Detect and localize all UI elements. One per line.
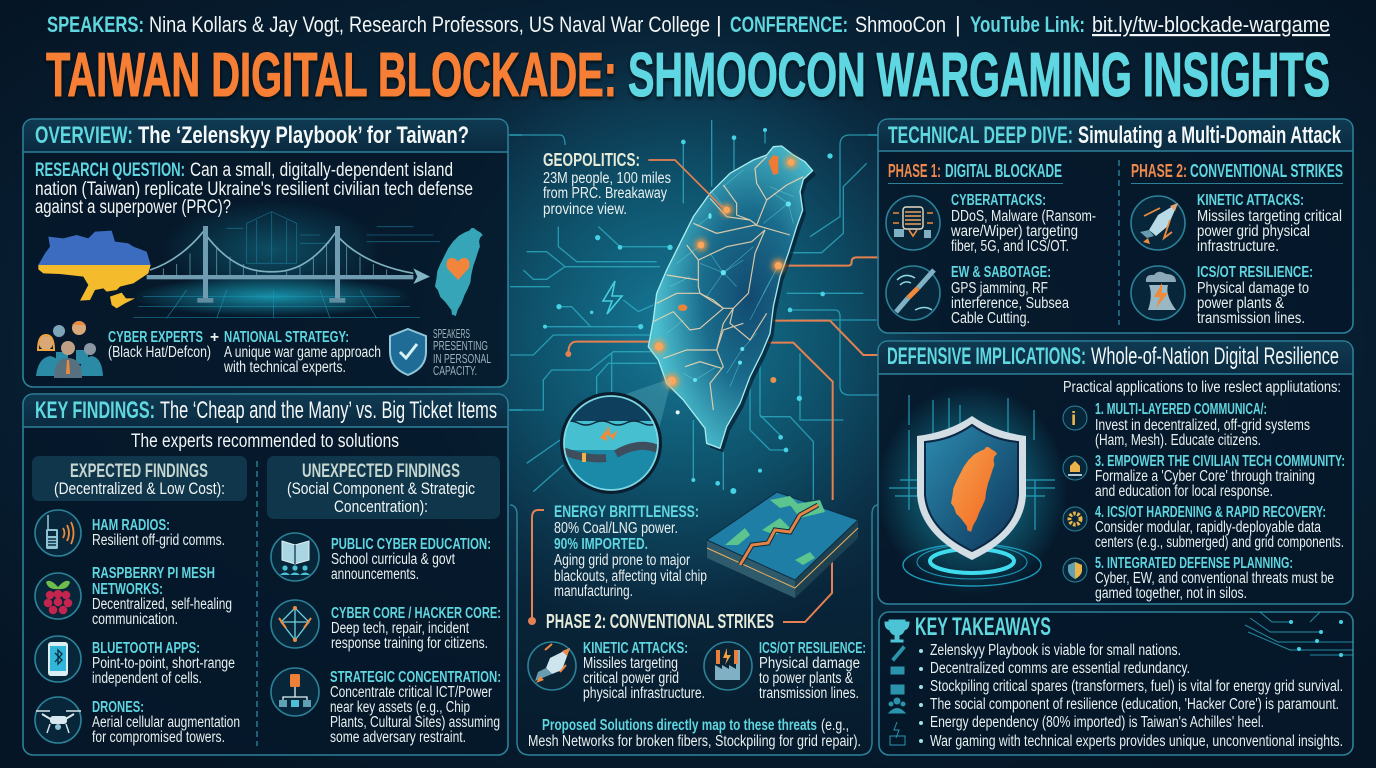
item: raspberry pi bbox=[35, 565, 232, 628]
text block: personal capacity disclaimer: SPEAKERS bbox=[433, 326, 470, 341]
icon: network core bbox=[271, 600, 319, 648]
heading: overview bbox=[35, 122, 469, 149]
column header: expected findings: (Decentralized & Low Cost): bbox=[54, 479, 225, 498]
illustration: shield with Taiwan bbox=[877, 385, 1067, 595]
item: kinetic attacks center bbox=[528, 640, 705, 702]
header: speakers, conference and link: CONFERENCE: bbox=[730, 12, 848, 37]
icon: phone bluetooth bbox=[35, 636, 81, 682]
column header: unexpected findings: (Social Component & Strategic bbox=[287, 479, 475, 498]
item: ew and sabotage: Cable Cutting. bbox=[951, 310, 1030, 327]
item: ics/ot center bbox=[704, 640, 866, 702]
heading: phase 2 center: PHASE 2: CONVENTIONAL STRIKES bbox=[546, 611, 774, 633]
column header: unexpected findings: Concentration): bbox=[334, 497, 428, 516]
item: integrated planning bbox=[1063, 555, 1334, 602]
item: strategic concentration bbox=[271, 668, 501, 746]
text block: geopolitics: 23M people, 100 miles bbox=[543, 170, 671, 187]
header: speakers, conference and link: | bbox=[716, 12, 722, 37]
orange connector to phase 2 bbox=[783, 555, 832, 622]
title: TAIWAN DIGITAL BLOCKADE: bbox=[46, 41, 617, 110]
illustration: bridge from Ukraine to Taiwan bbox=[38, 200, 440, 318]
heading: key findings bbox=[35, 397, 497, 424]
icon: radio bbox=[35, 510, 81, 556]
item: ics/ot resilience: power plants & bbox=[1197, 295, 1285, 312]
item: public cyber education bbox=[271, 533, 491, 583]
text block: energy brittleness: 90% IMPORTED. bbox=[554, 536, 648, 553]
takeaway list bbox=[919, 642, 1343, 750]
center background glow bbox=[340, 0, 1040, 680]
heading: key findings: The ‘Cheap and the Many’ vs. Big Ticket Items bbox=[160, 397, 497, 424]
orange bracket bbox=[528, 510, 544, 625]
item: strategic concentration: some adversary restraint. bbox=[330, 729, 466, 746]
item: ics/ot center: ICS/OT RESILIENCE: bbox=[759, 640, 866, 657]
item: public cyber education: PUBLIC CYBER EDUCATION: bbox=[331, 536, 491, 553]
icon: trophy bbox=[885, 620, 909, 642]
item: ham radios bbox=[35, 510, 225, 556]
item: drones bbox=[35, 697, 240, 746]
item: drones: for compromised towers. bbox=[92, 729, 225, 746]
connectors between panels bbox=[508, 135, 878, 410]
item: cyberattacks: fiber, 5G, and ICS/OT. bbox=[951, 238, 1069, 255]
item: multi-layered: Invest in decentralized, off-grid systems bbox=[1095, 417, 1310, 434]
item: strategic concentration: STRATEGIC CONCENTRATION: bbox=[330, 669, 501, 686]
item: empower: Formalize a 'Cyber Core' through training bbox=[1095, 468, 1315, 485]
text block: geopolitics: from PRC. Breakaway bbox=[543, 185, 667, 202]
icon: info bbox=[1063, 406, 1087, 430]
text block: research question: Can a small, digitally-dependent island bbox=[190, 160, 453, 181]
text block: energy brittleness: ENERGY BRITTLENESS: bbox=[554, 502, 699, 521]
heading: technical deep dive bbox=[888, 122, 1341, 149]
item: cyber core: Deep tech, repair, incident bbox=[331, 620, 470, 637]
takeaway list: Decentralized comms are essential redundancy. bbox=[930, 660, 1190, 677]
item: ew and sabotage: EW & SABOTAGE: bbox=[951, 264, 1051, 281]
item: kinetic attacks center: Missiles targeting bbox=[583, 655, 678, 672]
text block: personal capacity disclaimer: IN PERSONAL bbox=[433, 351, 491, 366]
icon: hierarchy bbox=[271, 668, 319, 716]
column header: unexpected findings bbox=[267, 456, 500, 519]
item: ics/ot resilience: Physical damage to bbox=[1197, 280, 1309, 297]
heading: key findings: KEY FINDINGS: bbox=[35, 397, 155, 424]
panel: technical deep dive bbox=[878, 119, 1353, 333]
icon: drone bbox=[35, 697, 81, 743]
header: speakers, conference and link: Nina Kollars & Jay Vogt, Research Professors, US Naval War College bbox=[149, 12, 710, 37]
icon: civic tech bbox=[1063, 456, 1087, 480]
takeaway list: Energy dependency (80% imported) is Taiwan's Achilles' heel. bbox=[930, 714, 1264, 731]
title bbox=[46, 41, 1330, 110]
header: speakers, conference and link: | bbox=[955, 12, 961, 37]
text block: geopolitics: GEOPOLITICS: bbox=[543, 150, 640, 170]
text block: cyber experts and national strategy: + bbox=[210, 329, 219, 346]
text block: energy brittleness: 80% Coal/LNG power. bbox=[554, 520, 678, 537]
text block: cyber experts and national strategy: CYBER EXPERTS bbox=[108, 329, 203, 346]
item: cyber core bbox=[271, 600, 501, 652]
icon: gear bbox=[1063, 507, 1087, 531]
column header: unexpected findings: UNEXPECTED FINDINGS bbox=[302, 461, 460, 482]
item: cyberattacks: CYBERATTACKS: bbox=[951, 192, 1046, 209]
heading: key takeaways: KEY TAKEAWAYS bbox=[915, 613, 1051, 641]
icon: shield check bbox=[390, 329, 426, 375]
text block: geopolitics bbox=[543, 150, 671, 218]
text block: cyber experts and national strategy: with technical experts. bbox=[223, 359, 346, 376]
panel: key findings bbox=[23, 394, 508, 755]
item: kinetic attacks center: KINETIC ATTACKS: bbox=[583, 640, 688, 657]
item: hardening bbox=[1063, 504, 1344, 551]
center circuit traces bbox=[510, 120, 880, 500]
map: Taiwan with grid and nodes bbox=[648, 146, 816, 452]
item: kinetic attacks: Missiles targeting critical bbox=[1197, 208, 1342, 225]
item: kinetic attacks bbox=[1131, 192, 1342, 255]
text block: energy brittleness: Aging grid prone to major bbox=[554, 552, 690, 569]
item: kinetic attacks center: physical infrastructure. bbox=[583, 685, 705, 702]
item: public cyber education: announcements. bbox=[331, 566, 419, 583]
item: ics/ot center: transmission lines. bbox=[759, 685, 859, 702]
icon: book and audience bbox=[271, 533, 319, 581]
item: ew and sabotage: interference, Subsea bbox=[951, 295, 1069, 312]
item: strategic concentration: Concentrate critical ICT/Power bbox=[330, 684, 492, 701]
item: ics/ot resilience: ICS/OT RESILIENCE: bbox=[1197, 264, 1313, 281]
item: ics/ot resilience bbox=[1131, 264, 1313, 327]
header: speakers, conference and link: ShmooCon bbox=[855, 12, 946, 37]
text block: proposed solutions bbox=[528, 717, 861, 750]
item: multi-layered: (Ham, Mesh). Educate citizens. bbox=[1095, 432, 1261, 449]
subheading: The experts recommended to solutions bbox=[131, 431, 399, 452]
panel: key takeaways bbox=[879, 612, 1353, 755]
icon: missile bbox=[1131, 196, 1185, 250]
item: raspberry pi: RASPBERRY PI MESH bbox=[92, 565, 215, 582]
item: public cyber education: School curricula & govt bbox=[331, 551, 456, 568]
item: bluetooth apps: BLUETOOTH APPS: bbox=[92, 640, 200, 657]
icon: missile bbox=[528, 642, 576, 690]
item: cyberattacks bbox=[886, 192, 1096, 255]
header: speakers, conference and link: SPEAKERS: bbox=[47, 12, 144, 37]
item: ew and sabotage bbox=[886, 264, 1069, 327]
item: multi-layered bbox=[1063, 401, 1310, 449]
text block: energy brittleness: blackouts, affecting vital chip bbox=[554, 568, 707, 585]
heading: phase 1: DIGITAL BLOCKADE bbox=[945, 161, 1062, 181]
item: ics/ot center: to power plants & bbox=[759, 670, 854, 687]
heading: overview: OVERVIEW: bbox=[35, 122, 133, 149]
column header: expected findings: EXPECTED FINDINGS bbox=[70, 461, 208, 482]
icon: cut cable bbox=[886, 266, 940, 320]
item: raspberry pi: communication. bbox=[92, 611, 178, 628]
text block: research question: against a superpower (PRC)? bbox=[35, 197, 231, 218]
icon: server bbox=[886, 196, 940, 250]
item: kinetic attacks: power grid physical bbox=[1197, 223, 1310, 240]
heading: phase 2 bbox=[1131, 161, 1343, 184]
icon: lightning bolt bbox=[603, 281, 622, 314]
text block: research question bbox=[35, 160, 473, 218]
column header: expected findings bbox=[32, 456, 247, 501]
icon: fractured terrain block bbox=[707, 492, 858, 598]
item: kinetic attacks center: critical power grid bbox=[583, 670, 679, 687]
heading: phase 1 bbox=[888, 161, 1063, 184]
text block: cyber experts and national strategy: A unique war game approach bbox=[224, 344, 381, 361]
text block: cyber experts and national strategy bbox=[108, 329, 381, 376]
item: drones: DRONES: bbox=[92, 699, 144, 716]
text block: personal capacity disclaimer: PRESENTING bbox=[433, 338, 488, 353]
item: kinetic attacks: KINETIC ATTACKS: bbox=[1197, 192, 1304, 209]
item: empower: and education for local response. bbox=[1095, 483, 1273, 500]
item: ew and sabotage: GPS jamming, RF bbox=[951, 280, 1048, 297]
text block: energy brittleness bbox=[554, 502, 707, 600]
icon: cooling tower bbox=[1131, 266, 1185, 320]
text block: research question: nation (Taiwan) replicate Ukraine's resilient civilian tech defense bbox=[35, 179, 473, 200]
item: cyberattacks: ware/Wiper) targeting bbox=[950, 223, 1078, 240]
item: raspberry pi: NETWORKS: bbox=[92, 581, 163, 598]
item: ham radios: Resilient off-grid comms. bbox=[92, 532, 225, 549]
icon: group of experts bbox=[36, 321, 103, 378]
item: cyber core: CYBER CORE / HACKER CORE: bbox=[331, 605, 501, 622]
icon: raspberry bbox=[35, 573, 81, 619]
text block: research question: RESEARCH QUESTION: bbox=[35, 160, 185, 181]
item: cyberattacks: DDoS, Malware (Ransom- bbox=[951, 208, 1096, 225]
panel: overview bbox=[23, 119, 508, 387]
heading: phase 1: PHASE 1: bbox=[888, 161, 941, 181]
item: strategic concentration: near key assets (e.g., Chip bbox=[330, 699, 470, 716]
item: bluetooth apps: Point-to-point, short-range bbox=[92, 655, 235, 672]
header: speakers, conference and link bbox=[47, 12, 1330, 37]
item: multi-layered: 1. MULTI-LAYERED COMMUNICA/: bbox=[1095, 401, 1267, 418]
item: ics/ot resilience: transmission lines. bbox=[1197, 310, 1305, 327]
item: kinetic attacks: infrastructure. bbox=[1197, 238, 1279, 255]
item: empower bbox=[1063, 453, 1345, 500]
panel: defensive implications bbox=[877, 341, 1353, 604]
text block: personal capacity disclaimer: CAPACITY. bbox=[433, 363, 477, 378]
item: bluetooth apps bbox=[35, 636, 235, 687]
text block: geopolitics: province view. bbox=[543, 201, 627, 218]
header: speakers, conference and link: YouTube Link: bbox=[970, 12, 1085, 37]
header: speakers, conference and link: bit.ly/tw-blockade-wargame bbox=[1092, 12, 1330, 37]
item: ham radios: HAM RADIOS: bbox=[92, 517, 170, 534]
icon: Ukraine map bbox=[38, 231, 151, 308]
text block: cyber experts and national strategy: (Black Hat/Defcon) bbox=[108, 344, 211, 361]
item: ics/ot center: Physical damage bbox=[759, 655, 860, 672]
icon: Taiwan with heart bbox=[435, 228, 483, 316]
heading: defensive implications: DEFENSIVE IMPLICATIONS: bbox=[887, 343, 1086, 370]
center lower frame bbox=[510, 505, 878, 755]
item: raspberry pi: Decentralized, self-healing bbox=[92, 596, 232, 613]
heading: overview: The ‘Zelenskyy Playbook’ for Taiwan? bbox=[138, 122, 469, 149]
icon: small shield bbox=[1063, 558, 1087, 582]
text block: proposed solutions: (e.g., bbox=[821, 717, 849, 734]
text block: cyber experts and national strategy: NATIONAL STRATEGY: bbox=[224, 329, 349, 346]
text block: proposed solutions: Proposed Solutions directly map to these threats bbox=[542, 717, 817, 734]
takeaway icons bbox=[889, 646, 905, 745]
icon: info: i bbox=[1071, 409, 1076, 430]
takeaway list: Zelenskyy Playbook is viable for small nations. bbox=[930, 642, 1181, 659]
item: drones: Aerial cellular augmentation bbox=[92, 714, 240, 731]
item: cyber core: response training for citizens. bbox=[331, 635, 488, 652]
icon: power plant bbox=[704, 642, 752, 690]
text block: personal capacity disclaimer bbox=[433, 326, 491, 378]
item: strategic concentration: Plants, Cultural Sites) assuming bbox=[330, 714, 500, 731]
item: bluetooth apps: independent of cells. bbox=[92, 670, 202, 687]
text block: energy brittleness: manufacturing. bbox=[554, 583, 633, 600]
item: integrated planning: gamed together, not in silos. bbox=[1095, 585, 1247, 602]
heading: phase 2: PHASE 2: bbox=[1131, 161, 1187, 181]
text block: proposed solutions: Mesh Networks for broken fibers, Stockpiling for grid repair). bbox=[528, 733, 861, 750]
icon: subsea cable cut magnifier bbox=[560, 378, 672, 495]
heading: technical deep dive: TECHNICAL DEEP DIVE: bbox=[888, 122, 1073, 149]
